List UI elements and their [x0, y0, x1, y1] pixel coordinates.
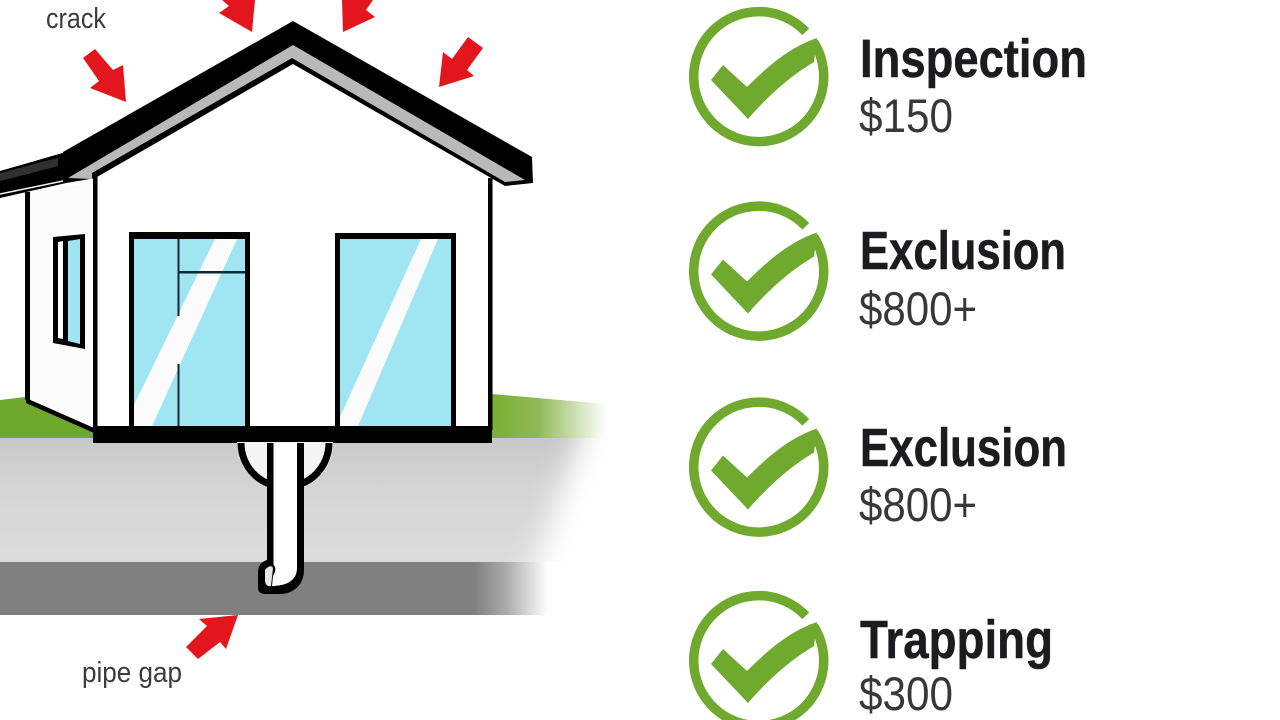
icon: check	[694, 12, 824, 142]
arrow: right roof	[439, 37, 483, 87]
item: trapping	[694, 596, 1053, 720]
price: exclusion 1: $800+	[859, 282, 977, 335]
arrow: pipe gap	[186, 615, 238, 659]
annex roof	[0, 152, 96, 198]
item: inspection	[694, 12, 1087, 142]
heading: inspection: Inspection	[860, 29, 1087, 89]
main roof	[63, 21, 533, 186]
price: exclusion 2: $800+	[859, 478, 977, 531]
item: exclusion 1	[694, 206, 1066, 336]
label: pipe gap: pipe gap	[82, 657, 182, 689]
window right	[335, 233, 456, 428]
price: inspection: $150	[859, 89, 953, 142]
ground: soil layer	[0, 438, 640, 562]
window left	[129, 232, 250, 428]
drain pipe	[238, 443, 332, 594]
grass right	[492, 394, 606, 438]
grass left	[0, 397, 93, 438]
price: trapping: $300	[859, 667, 953, 720]
icon: check	[694, 206, 824, 336]
side window	[53, 234, 85, 349]
label: crack: crack	[46, 3, 106, 35]
ground: dark pipe layer	[0, 562, 548, 615]
heading: exclusion 1: Exclusion	[860, 221, 1066, 281]
main wall	[97, 63, 488, 427]
arrow: upper left roof	[83, 49, 126, 102]
arrow: top left of peak	[219, 0, 255, 32]
heading: exclusion 2: Exclusion	[860, 418, 1067, 478]
arrow: top right of peak	[342, 0, 375, 32]
icon: check	[694, 596, 824, 720]
side annex wall	[25, 182, 94, 433]
heading: trapping: Trapping	[860, 610, 1053, 670]
icon: check	[694, 402, 824, 532]
foundation slab	[93, 426, 492, 443]
house	[0, 21, 533, 443]
item: exclusion 2	[694, 402, 1067, 532]
